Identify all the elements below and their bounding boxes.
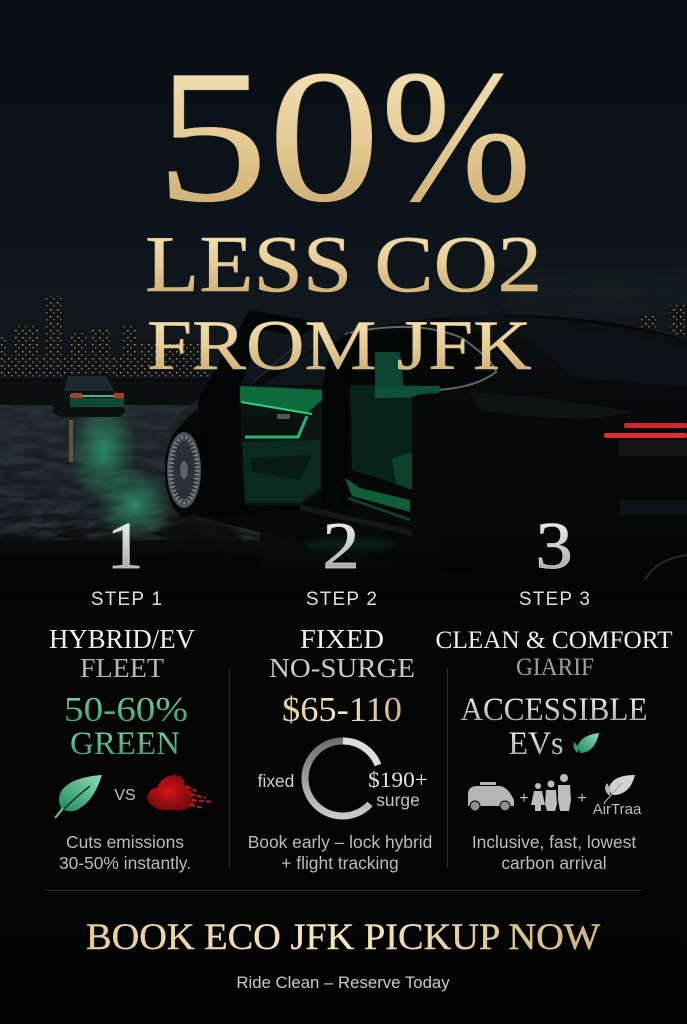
title line: from jfk: FROM JFK [147,307,532,385]
green stat [64,690,188,762]
step number 2: 2 [323,509,359,583]
ring label: surge price [368,767,428,810]
title line: 50%: 50 [156,31,380,241]
plus: + [577,790,587,807]
distant car [53,373,125,417]
tagline: Ride Clean – Reserve Today [236,973,450,992]
price: $65-110 [282,690,402,729]
description: 30-50% instantly. [59,853,191,873]
description: Inclusive, fast, lowest [472,832,636,852]
open door frame [198,310,322,516]
main car [162,310,687,585]
heading: HYBRID/EV [49,624,195,654]
tail light [604,423,687,456]
sky clouds [500,272,687,312]
icon: red cloud [147,775,213,810]
ring label: surge price: surge [376,790,420,810]
divider above call to action [46,890,642,891]
heading: FIXED [300,624,384,654]
column divider [229,668,230,868]
green floor reflection [305,537,395,553]
description [59,832,191,873]
accessible evs: ACCESSIBLE [460,692,648,728]
rear body [412,316,687,585]
icon: silver leaf with brand [593,775,642,818]
column 3: clean and comfort [436,509,672,873]
heading: NO-SURGE [269,653,415,683]
call to action: BOOK ECO JFK PICKUP NOW [86,917,600,958]
icon: silver leaf with brand: AirTraa [593,801,642,818]
title line: less co2: LESS CO2 [145,220,542,309]
heading: FLEET [80,653,165,683]
cabin interior [345,332,490,515]
accessible evs [460,692,648,762]
title line: 50%: % [381,32,531,242]
rear seat [345,352,440,520]
heading [269,624,415,683]
title line: 50% [156,31,531,242]
lower side panel sheen [620,500,687,515]
wheel [165,425,207,517]
fade to black under car [0,525,687,600]
body crease [470,392,634,418]
step label: STEP 2 [306,589,378,610]
description: Cuts emissions [66,832,184,852]
step number 1: 1 [107,509,143,583]
heading [49,624,195,683]
side sill [300,505,412,536]
description: + flight tracking [281,853,399,873]
green stat: 50-60% [64,690,188,729]
description [472,832,636,873]
step label: STEP 1 [91,589,163,610]
plus: + [519,790,529,807]
ring chart: fixed vs surge [305,741,378,816]
front fender highlight [166,398,200,450]
description: carbon arrival [501,853,607,873]
window chrome line [345,327,496,390]
heading [436,627,672,681]
city skyline [0,296,687,380]
column 1: hybrid/EV fleet [49,509,213,873]
body edge covering cabin [412,393,442,580]
column 2: fixed no-surge [248,509,432,873]
icon: leaf [55,775,102,818]
accessible evs: EVs [508,726,564,762]
b pillar [322,332,360,515]
icon: van [468,782,514,811]
car silhouette [165,315,687,585]
vs label: VS [114,787,136,804]
ring label: fixed: fixed [258,771,294,791]
door panel [240,385,323,505]
wheel shadow [162,517,238,553]
icon: family [531,774,571,811]
step number 3: 3 [536,509,572,583]
description: Book early – lock hybrid [248,832,432,852]
windscreen glass [262,330,345,385]
rear fender glint [645,555,687,580]
ring label: surge price: $190+ [368,767,428,792]
title [145,31,542,385]
heading: GIARIF [516,654,594,681]
green stat: GREEN [70,726,180,762]
green reflection [69,394,137,506]
description [248,832,432,873]
wet road [0,378,260,565]
heading: CLEAN & COMFORT [436,627,672,654]
step label: STEP 3 [519,589,591,610]
icon: small leaf [574,733,599,753]
rear glass [510,329,687,385]
